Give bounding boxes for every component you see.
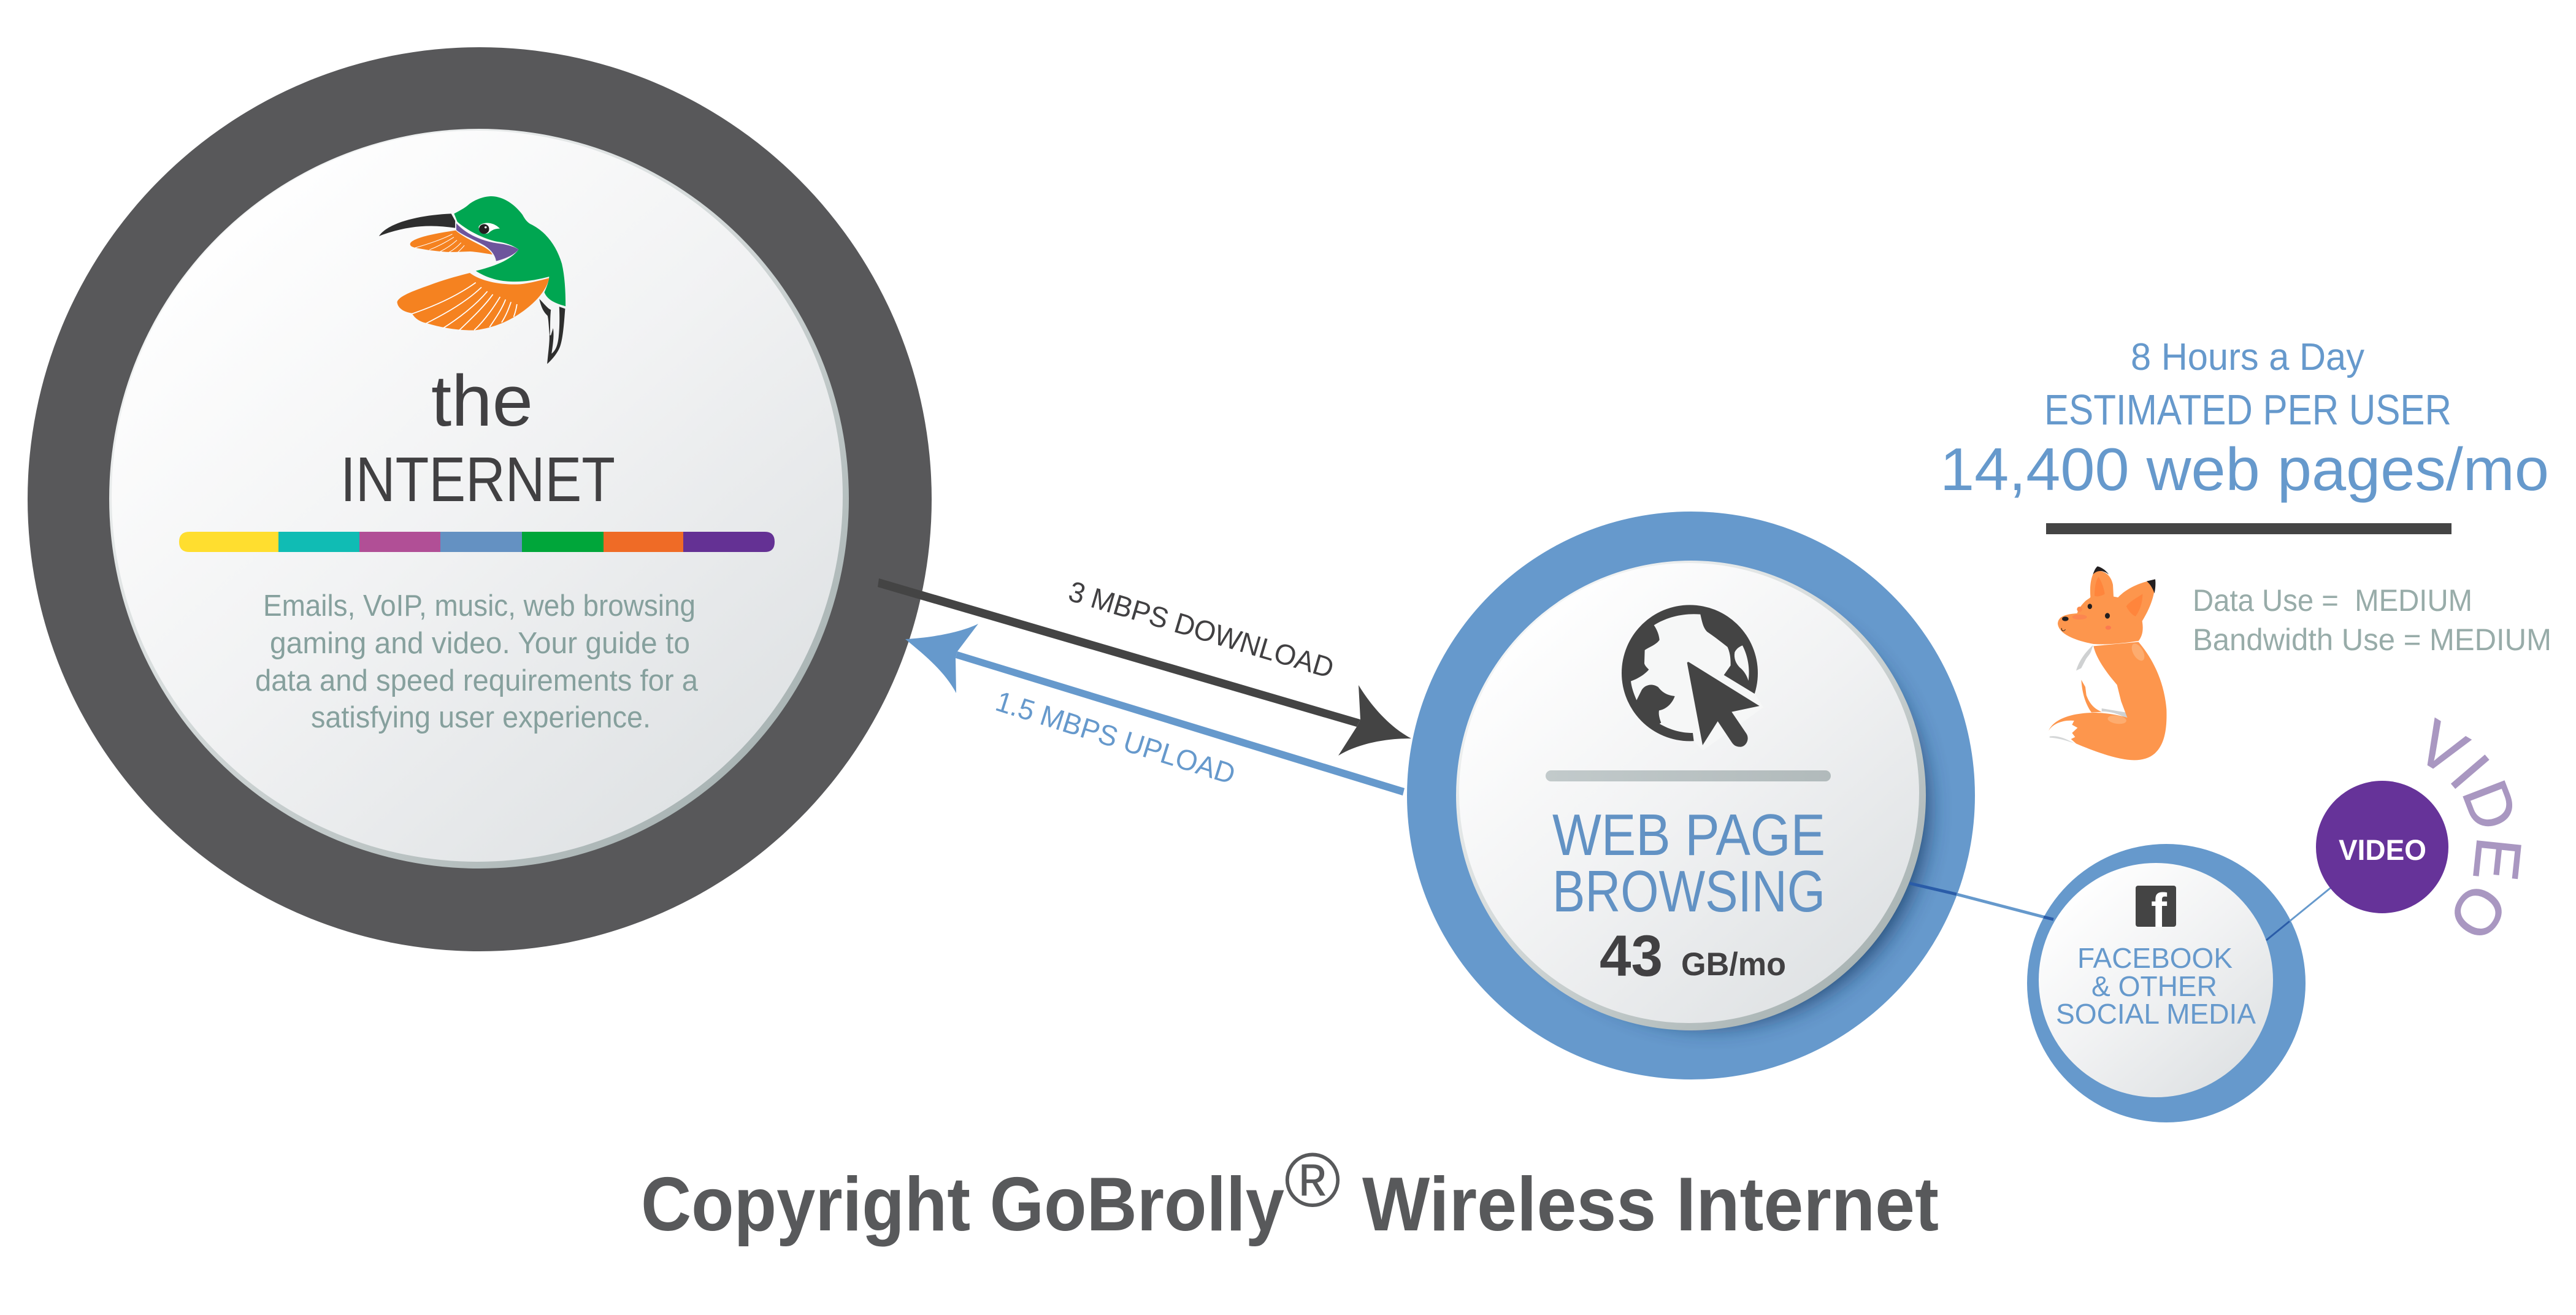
panel: video circle <box>2316 781 2448 913</box>
panel: usage stats <box>1940 336 2551 760</box>
icon: fox <box>2049 566 2166 760</box>
description text: gaming and video. Your guide to <box>270 627 690 660</box>
label: facebook and other social media <box>2056 942 2256 1030</box>
blue ring <box>2027 844 2306 1122</box>
label: facebook and other social media: SOCIAL MEDIA <box>2056 998 2256 1030</box>
connector line to web page circle <box>1909 883 2053 919</box>
heading: INTERNET: INTERNET <box>340 444 615 515</box>
arrow: 3 mbps download <box>878 578 1411 756</box>
circle rim <box>109 129 849 868</box>
web pages per month: 14,400 web pages/mo <box>1940 435 2549 503</box>
icon: facebook <box>2136 883 2176 937</box>
data use: Data Use = MEDIUM <box>2193 583 2472 618</box>
icon: globe with cursor <box>1622 605 1763 750</box>
shadow on ring <box>1607 642 1941 1039</box>
description text <box>255 589 699 734</box>
circle face <box>112 131 843 862</box>
footer: copyright: Wireless Internet <box>1362 1162 1939 1247</box>
panel: the internet circle <box>28 47 932 951</box>
footer: copyright: ® <box>1284 1138 1341 1223</box>
footer: copyright <box>641 1138 1939 1247</box>
grey divider bar <box>1546 770 1831 781</box>
data figure: 43 GB/mo: 43 <box>1600 924 1663 989</box>
hours per day: 8 Hours a Day <box>2131 336 2364 378</box>
panel: social media circle <box>1909 844 2306 1122</box>
data figure: 43 GB/mo: GB/mo <box>1681 946 1786 983</box>
footer: copyright: Copyright GoBrolly <box>641 1162 1284 1247</box>
description text: satisfying user experience. <box>311 701 651 734</box>
blue ring <box>1407 512 1975 1079</box>
heading: the: the <box>431 361 533 442</box>
dark rule <box>2046 523 2451 534</box>
heading: web page browsing: WEB PAGE <box>1552 802 1825 868</box>
description text: Emails, VoIP, music, web browsing <box>263 589 696 623</box>
circle rim <box>1456 561 1926 1030</box>
panel: video circle: VIDEO <box>2339 834 2426 866</box>
connector: social to video <box>2266 886 2333 940</box>
heading: web page browsing <box>1552 802 1825 924</box>
description text: data and speed requirements for a <box>255 664 699 697</box>
arrow: 1.5 mbps upload <box>905 624 1405 796</box>
dark outer ring <box>28 47 932 951</box>
panel: web page browsing circle <box>1407 512 1975 1079</box>
icon: facebook: f <box>2151 883 2168 937</box>
circle face <box>2039 863 2273 1097</box>
data figure: 43 GB/mo <box>1600 924 1786 989</box>
label: upload speed: 1.5 MBPS UPLOAD <box>992 684 1240 791</box>
label: download speed: 3 MBPS DOWNLOAD <box>1065 575 1338 684</box>
heading: web page browsing: BROWSING <box>1552 859 1825 924</box>
bandwidth use: Bandwidth Use = MEDIUM <box>2193 623 2551 657</box>
icon: hummingbird <box>379 196 565 364</box>
rainbow bar <box>179 532 775 552</box>
label: facebook and other social media: & OTHER <box>2091 970 2217 1002</box>
circle face <box>1459 563 1919 1023</box>
curved label: video: VIDEO <box>2428 718 2521 935</box>
label: facebook and other social media: FACEBOOK <box>2077 942 2233 974</box>
estimated per user: ESTIMATED PER USER <box>2044 386 2451 434</box>
